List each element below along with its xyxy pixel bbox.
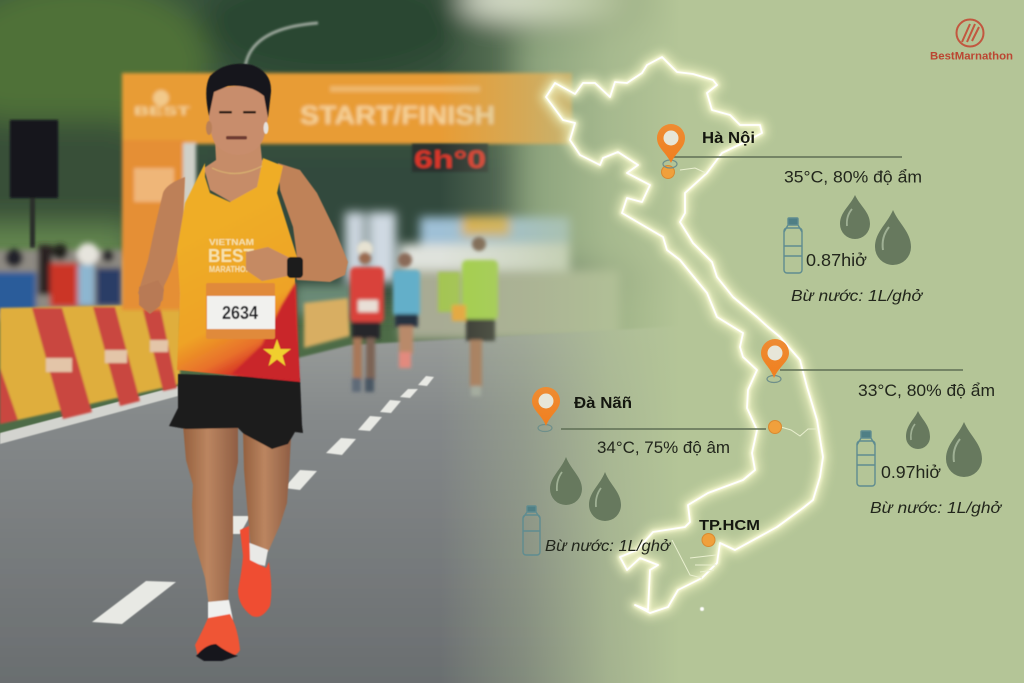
map pin	[532, 387, 560, 432]
bottle	[523, 506, 540, 555]
bottle	[857, 431, 875, 486]
trees backdrop	[0, 0, 700, 300]
map outline	[546, 57, 823, 613]
barrier right	[304, 298, 350, 348]
runner green	[462, 237, 498, 396]
neck and chest	[204, 140, 283, 205]
map glow	[546, 57, 823, 613]
race bib	[206, 283, 275, 339]
crowd band	[0, 243, 185, 320]
speaker	[10, 120, 58, 248]
runner left leg	[183, 425, 238, 606]
internal lines	[672, 168, 816, 578]
distant runners	[350, 237, 498, 396]
runner	[138, 64, 348, 661]
necklace	[212, 166, 262, 174]
location dot	[768, 420, 782, 434]
shirt red zone	[232, 282, 299, 380]
barrier left	[0, 304, 180, 424]
location dot	[662, 166, 674, 178]
map pin	[657, 124, 685, 168]
map pin	[761, 339, 789, 382]
face	[209, 86, 268, 155]
sweat rate: 0.87hiở	[806, 250, 867, 270]
socks	[208, 600, 233, 622]
hair	[206, 64, 271, 118]
race bib: 2634	[222, 303, 258, 323]
bottle	[784, 218, 802, 273]
connector line	[780, 369, 963, 371]
conditions: 33°C, 80% độ ẩm	[858, 381, 995, 400]
droplet small	[840, 195, 870, 239]
city name: TP.HCM	[699, 517, 760, 534]
arch	[122, 73, 572, 313]
city name: Hà Nội	[702, 130, 755, 147]
panel: Hà Nội	[657, 124, 923, 305]
shirt lettering: MARATHON	[209, 265, 251, 274]
location dot	[702, 534, 715, 546]
road	[0, 325, 700, 683]
watch	[287, 257, 303, 278]
logo mark	[956, 20, 984, 46]
left fist	[139, 280, 164, 314]
shoe left	[195, 614, 240, 661]
runner red	[350, 241, 384, 392]
map of Vietnam	[546, 57, 823, 613]
panel: central	[761, 339, 1002, 517]
panel: Đà Nẵng	[523, 387, 782, 555]
tank top	[177, 158, 300, 382]
refill: Bừ nước: 1L/ghở	[791, 288, 923, 305]
map halo	[546, 57, 823, 613]
connector line	[561, 428, 766, 430]
left arm	[138, 177, 185, 313]
shoe right	[238, 526, 271, 617]
arch: BEST	[134, 104, 191, 118]
eyes and mouth	[219, 111, 256, 140]
shorts	[169, 374, 303, 449]
connector line	[672, 156, 902, 158]
runner blue	[393, 253, 420, 368]
droplet small	[906, 411, 930, 449]
panel: TP.HCM	[699, 517, 760, 546]
star	[263, 339, 291, 366]
droplet large	[875, 210, 911, 265]
road dashes	[92, 376, 434, 624]
logo	[930, 20, 1013, 62]
shirt lettering: VIETNAM	[209, 238, 254, 247]
race clock: 6h°0	[414, 146, 486, 174]
hand on chest	[246, 247, 290, 281]
arch: START/FINISH	[300, 100, 495, 130]
distant backdrop band	[296, 212, 620, 340]
conditions: 34°C, 75% độ âm	[597, 438, 730, 457]
conditions: 35°C, 80% độ ẩm	[784, 168, 922, 186]
race clock	[412, 144, 488, 174]
droplet right	[589, 472, 621, 521]
logo: BestMarnathon	[930, 50, 1013, 62]
refill: Bừ nước: 1L/ghở	[545, 538, 672, 555]
green fade panel	[440, 0, 680, 683]
droplet large	[946, 422, 982, 477]
runner right leg	[243, 432, 291, 552]
shirt lettering	[208, 238, 254, 274]
lamp post	[245, 23, 318, 68]
road edge line	[0, 386, 178, 444]
sweat rate: 0.97hiở	[881, 462, 941, 482]
shirt lettering: BEST	[208, 246, 254, 266]
city name: Đà Nãñ	[574, 395, 632, 412]
refill: Bừ nước: 1L/ghở	[870, 500, 1002, 517]
droplet left	[550, 457, 582, 505]
right arm	[278, 163, 348, 282]
